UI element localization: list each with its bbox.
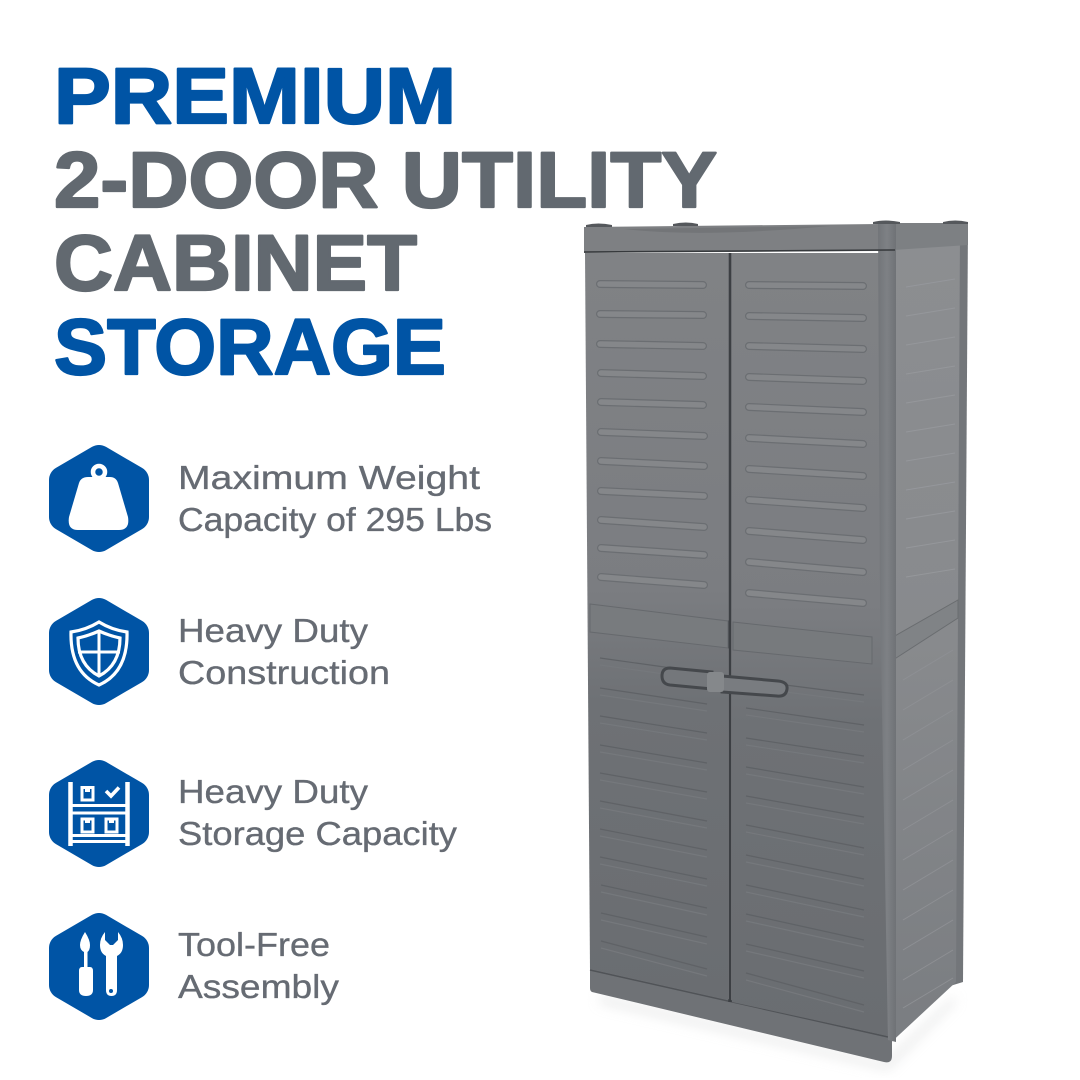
right door band xyxy=(733,622,872,664)
back post xyxy=(950,224,968,986)
feature: storage capacity xyxy=(63,774,457,853)
left door xyxy=(585,253,728,1000)
upper ribs: right door xyxy=(749,285,863,603)
front corner post xyxy=(878,224,896,1042)
feature: assembly xyxy=(63,927,339,1006)
left door band xyxy=(590,604,728,648)
text: assembly: Assembly xyxy=(178,969,339,1006)
top knobs xyxy=(586,220,968,227)
feature: construction xyxy=(63,612,390,692)
icon: shield xyxy=(63,612,135,691)
side panel ribs xyxy=(903,279,955,1008)
top rail shadow xyxy=(584,250,895,252)
top rail xyxy=(584,224,880,253)
feature: weight capacity xyxy=(63,459,492,539)
door gap xyxy=(728,253,732,1002)
icon: shelves xyxy=(63,774,135,853)
floor shadow xyxy=(600,995,955,1070)
icon: tools xyxy=(63,927,135,1006)
title: STORAGE xyxy=(54,302,446,391)
side top rail xyxy=(893,223,968,250)
text: weight capacity: Maximum Weight xyxy=(178,460,481,497)
title: PREMIUM xyxy=(54,51,456,140)
text: weight capacity xyxy=(178,460,492,539)
text: storage capacity: Heavy Duty xyxy=(178,774,368,811)
text: construction: Construction xyxy=(178,655,390,692)
product: utility cabinet xyxy=(584,220,968,1070)
upper ribs: left door xyxy=(600,284,704,585)
text: assembly xyxy=(178,927,339,1006)
text: construction: Heavy Duty xyxy=(178,613,368,650)
right door xyxy=(732,253,888,1036)
top recess xyxy=(624,226,830,233)
side panel xyxy=(885,232,960,1048)
title xyxy=(54,51,717,391)
text: storage capacity: Storage Capacity xyxy=(178,816,457,853)
base xyxy=(590,968,892,1062)
door handle xyxy=(662,668,787,696)
title: 2-DOOR UTILITY xyxy=(54,135,717,224)
text: storage capacity xyxy=(178,774,457,853)
lower ribs: left door xyxy=(600,658,707,976)
text: assembly: Tool-Free xyxy=(178,927,330,964)
text: weight capacity: Capacity of 295 Lbs xyxy=(178,502,492,539)
title: CABINET xyxy=(54,218,417,307)
text: construction xyxy=(178,613,390,692)
lower ribs: right door xyxy=(746,680,864,1012)
side band xyxy=(893,600,958,660)
icon: weight xyxy=(63,459,135,538)
